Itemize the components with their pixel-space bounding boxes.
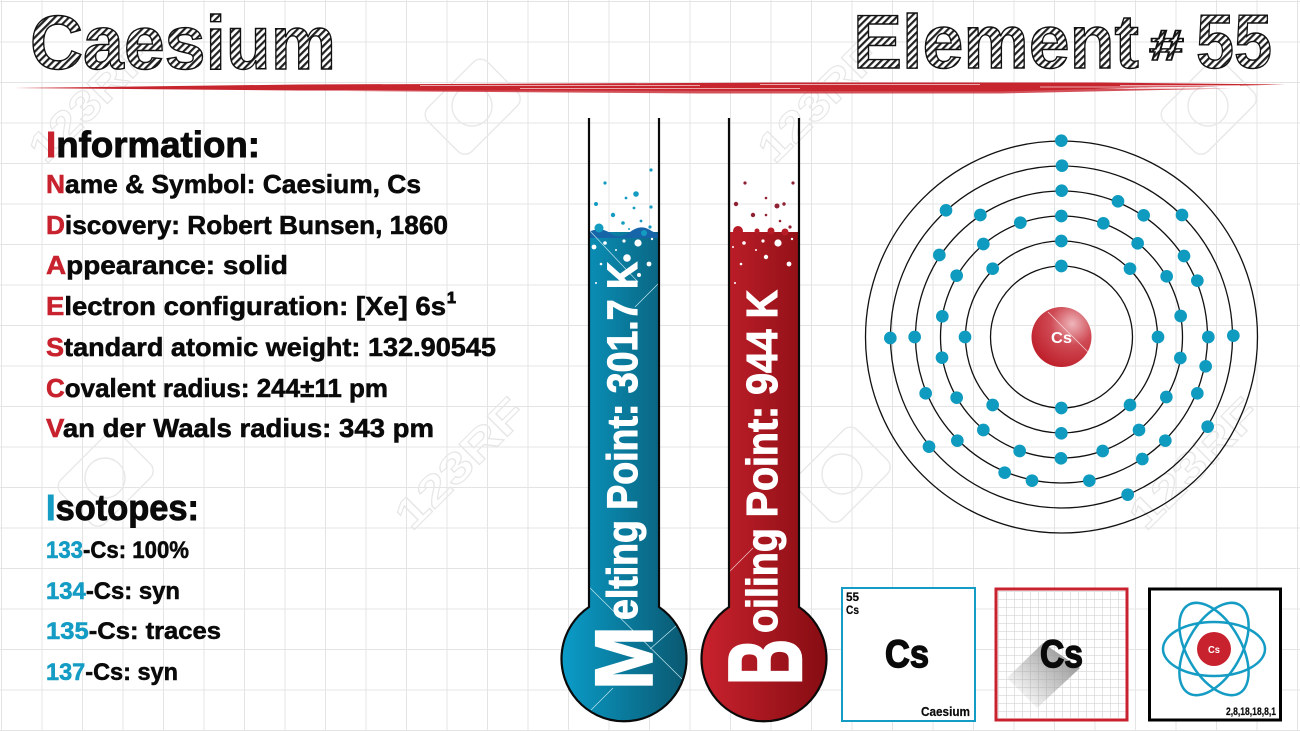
fine grid: [998, 591, 1125, 718]
nucleus symbol: Cs: [1208, 644, 1220, 656]
rising red bubbles: [734, 181, 795, 229]
label: large M: M: [579, 626, 670, 690]
isotope 135: 135-Cs: traces: [46, 618, 221, 645]
shell rings: [866, 141, 1258, 533]
atom diagram: electron shells: [866, 134, 1258, 533]
card: long shadow symbol: [996, 589, 1127, 720]
card: periodic table entry: [842, 588, 975, 721]
covalent radius: Covalent radius: 244±11 pm: [46, 373, 388, 403]
white bubbles in red liquid: [732, 238, 793, 284]
isotope 134: 134-Cs: syn: [46, 578, 180, 605]
shell configuration: 2,8,18,18,8,1: [1226, 706, 1276, 718]
symbol: Cs: [1040, 633, 1083, 676]
label: melting point value: elting Point: 301.7 K: [599, 262, 647, 620]
tube outline: [562, 118, 687, 721]
title: Element number: [853, 0, 1272, 85]
panel: information: [46, 124, 496, 443]
rising blue bubbles: [594, 168, 653, 236]
appearance: Appearance: solid: [46, 250, 288, 280]
thermometer: boiling point: [695, 118, 835, 731]
card frame: [996, 589, 1127, 720]
standard atomic weight: Standard atomic weight: 132.90545: [46, 332, 496, 362]
card frame: [842, 588, 975, 721]
thermometer: melting point: [555, 118, 695, 731]
nucleus: [1032, 307, 1092, 367]
red liquid: [702, 226, 826, 720]
title: Caesium: Caesium: [30, 1, 336, 86]
watermarks: 123RF: [1119, 388, 1269, 538]
atomic number: 55: [846, 590, 859, 604]
number 55: 55: [1196, 0, 1272, 85]
electron configuration superscript: 1: [447, 290, 456, 307]
heading: information: Information:: [46, 124, 260, 165]
nucleus symbol: Cs: [1051, 330, 1072, 347]
hash sign: #: [1149, 21, 1184, 70]
long shadow: [1007, 643, 1080, 708]
red brush underline: [14, 82, 1285, 94]
large symbol: Cs: [885, 633, 929, 676]
tube outline: [702, 118, 827, 721]
watermarks: [19, 32, 1269, 538]
isotope 137: 137-Cs: syn: [46, 659, 178, 686]
name and symbol: Name & Symbol: Caesium, Cs: [46, 169, 421, 199]
element word: Element: [853, 0, 1139, 85]
nucleus: [1197, 632, 1231, 666]
electrons: [884, 134, 1240, 501]
isotope 133: 133-Cs: 100%: [46, 537, 189, 564]
white bubbles in blue liquid: [592, 238, 653, 284]
watermarks: 123RF: [19, 32, 158, 171]
discovery: Discovery: Robert Bunsen, 1860: [46, 210, 448, 240]
heading: isotopes: Isotopes:: [46, 487, 199, 528]
card frame: [1150, 589, 1280, 720]
electron configuration: Electron configuration: [Xe] 6s: [46, 291, 446, 321]
element name: Caesium: [921, 704, 970, 719]
blue liquid: [562, 227, 686, 720]
panel: isotopes: [46, 487, 221, 686]
orbits: [1163, 591, 1265, 707]
label: large B: B: [708, 639, 824, 685]
small symbol: Cs: [846, 603, 859, 617]
van der waals radius: Van der Waals radius: 343 pm: [46, 413, 434, 443]
watermarks: 123RF: [748, 32, 887, 171]
card: atom icon: [1150, 589, 1280, 720]
label: boiling point value: oiling Point: 944 K: [738, 290, 787, 633]
watermarks: 123RF: [385, 388, 535, 538]
